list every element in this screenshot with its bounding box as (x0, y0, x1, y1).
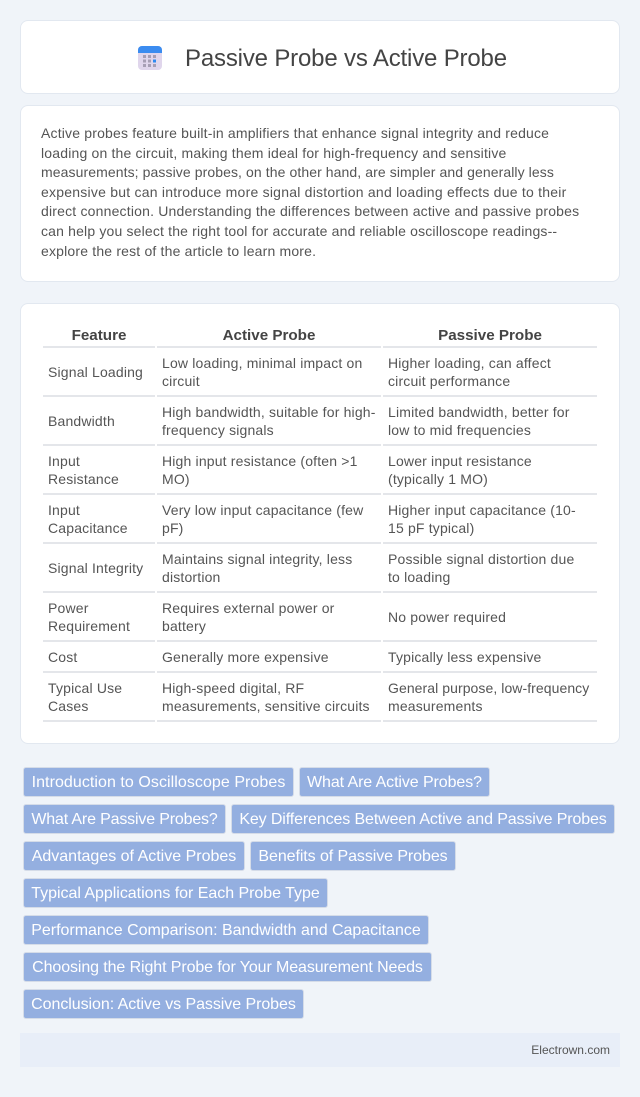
tag: Introduction to Oscilloscope Probes (32, 774, 285, 791)
tag (23, 952, 432, 982)
comparison table: circuit (162, 373, 200, 389)
intro paragraph: expensive but can introduce more signal distortion and loading effects due to their (41, 184, 566, 200)
title: Passive Probe vs Active Probe (185, 45, 507, 72)
comparison table: measurements (388, 698, 483, 714)
comparison table: pF) (162, 520, 184, 536)
comparison table: distortion (162, 569, 221, 585)
comparison table: frequency signals (162, 422, 274, 438)
row: cost (43, 649, 597, 673)
intro paragraph: loading on the circuit, making them ideal for high-frequency and sensitive (41, 145, 506, 161)
comparison table: General purpose, low-frequency (388, 680, 589, 696)
comparison table: High bandwidth, suitable for high- (162, 404, 376, 420)
intro paragraph: Active probes feature built-in amplifiers that enhance signal integrity and reduce (41, 125, 549, 141)
row: bandwidth (43, 404, 597, 446)
tag (250, 841, 456, 871)
comparison table: Passive Probe (438, 327, 542, 344)
comparison table: Resistance (48, 471, 119, 487)
comparison table: Bandwidth (48, 413, 115, 429)
intro paragraph: direct connection. Understanding the differences between active and passive probes (41, 203, 579, 219)
comparison table: low to mid frequencies (388, 422, 531, 438)
tag: Benefits of Passive Probes (258, 848, 448, 865)
comparison table: Signal Integrity (48, 560, 143, 576)
comparison table: Active Probe (223, 327, 315, 344)
comparison table: Low loading, minimal impact on (162, 355, 362, 371)
tag: Typical Applications for Each Probe Type (31, 885, 320, 902)
comparison table: Higher input capacitance (10- (388, 502, 576, 518)
comparison table: Typically less expensive (388, 649, 541, 665)
comparison table: Input (48, 502, 80, 518)
comparison table: High input resistance (often >1 (162, 453, 358, 469)
intro paragraph: measurements; passive probes, on the other hand, are simpler and generally less (41, 164, 554, 180)
table of contents tags (23, 767, 615, 1019)
tag (23, 767, 294, 797)
comparison table (43, 327, 597, 722)
comparison table: No power required (388, 609, 506, 625)
tag: Key Differences Between Active and Passive Probes (239, 811, 607, 828)
footer bar (20, 1033, 620, 1067)
comparison table: (typically 1 MO) (388, 471, 488, 487)
comparison table: Typical Use (48, 680, 122, 696)
comparison table: Requires external power or (162, 600, 335, 616)
comparison table: 15 pF typical) (388, 520, 474, 536)
tag (23, 841, 245, 871)
tag (299, 767, 490, 797)
table header (43, 327, 597, 348)
icon: calendar (138, 46, 162, 70)
tag (23, 878, 328, 908)
tag: Conclusion: Active vs Passive Probes (31, 996, 296, 1013)
row: power requirement (43, 600, 597, 642)
comparison table: Signal Loading (48, 364, 143, 380)
row: typical use cases (43, 680, 597, 722)
comparison table: Requirement (48, 618, 130, 634)
tag: What Are Passive Probes? (31, 811, 218, 828)
comparison table: Cost (48, 649, 77, 665)
tag (231, 804, 615, 834)
tag (23, 915, 429, 945)
tag (23, 989, 304, 1019)
comparison table: Feature (72, 327, 126, 344)
header panel (20, 20, 620, 94)
row: input resistance (43, 453, 597, 495)
comparison table: Cases (48, 698, 89, 714)
intro text panel (20, 105, 620, 282)
comparison table panel (20, 303, 620, 744)
comparison table: High-speed digital, RF (162, 680, 304, 696)
tag: Performance Comparison: Bandwidth and Capacitance (31, 922, 421, 939)
comparison table: Generally more expensive (162, 649, 329, 665)
footer source: Electrown.com (531, 1043, 610, 1057)
comparison table: Very low input capacitance (few (162, 502, 363, 518)
intro paragraph: explore the rest of the article to learn more. (41, 243, 316, 259)
comparison table: measurements, sensitive circuits (162, 698, 370, 714)
comparison table: Input (48, 453, 80, 469)
comparison table: Limited bandwidth, better for (388, 404, 570, 420)
comparison table: Capacitance (48, 520, 128, 536)
comparison table: Power (48, 600, 89, 616)
tag: Choosing the Right Probe for Your Measurement Needs (32, 959, 423, 976)
row: input capacitance (43, 502, 597, 544)
intro paragraph (41, 125, 579, 259)
tag: Advantages of Active Probes (32, 848, 236, 865)
comparison table: Maintains signal integrity, less (162, 551, 352, 567)
comparison table: battery (162, 618, 206, 634)
comparison table: Higher loading, can affect (388, 355, 551, 371)
row: signal integrity (43, 551, 597, 593)
comparison table: circuit performance (388, 373, 510, 389)
comparison table: MO) (162, 471, 190, 487)
row: signal loading (43, 355, 597, 397)
tag: What Are Active Probes? (307, 774, 482, 791)
comparison table: to loading (388, 569, 450, 585)
intro paragraph: can help you select the right tool for accurate and reliable oscilloscope readings-- (41, 223, 557, 239)
tag (23, 804, 226, 834)
comparison table: Lower input resistance (388, 453, 532, 469)
comparison table: Possible signal distortion due (388, 551, 574, 567)
